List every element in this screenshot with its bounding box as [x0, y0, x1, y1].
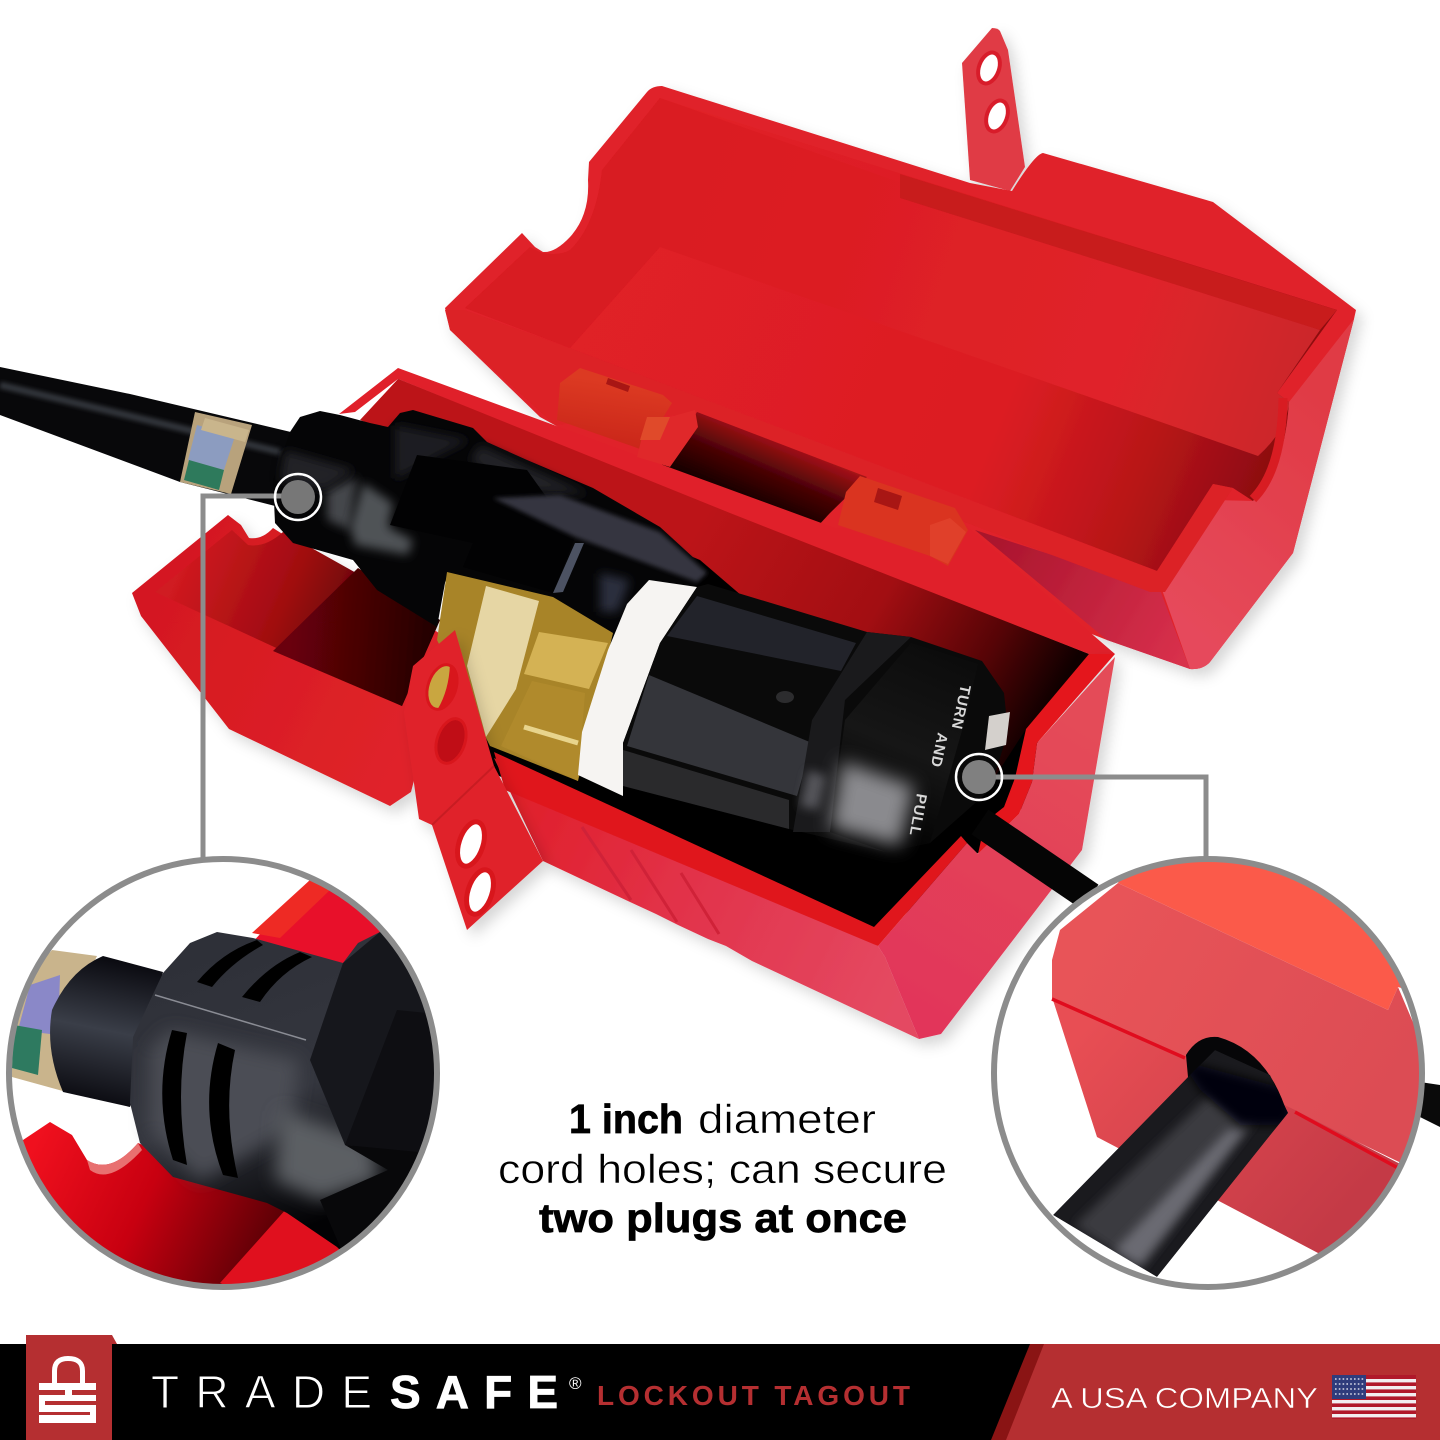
front face ribs [582, 827, 719, 934]
caption text block: cord holes; can secure [498, 1146, 947, 1192]
lid floor and inner walls [465, 98, 1337, 571]
lid right end face [1160, 319, 1354, 669]
dark interior [155, 530, 440, 706]
caption text block: diameter [698, 1096, 876, 1142]
detail circle ring [994, 859, 1422, 1287]
lid left end wall [465, 98, 660, 348]
rear rim band [339, 368, 1115, 654]
lid outer silhouette [445, 86, 1356, 669]
front locking tab with four holes [404, 630, 543, 930]
cord stub right of detail circle [1420, 1082, 1440, 1127]
end rim around cord hole [978, 654, 1115, 854]
foil label [8, 950, 97, 1093]
plug grip texture highlights [280, 425, 590, 555]
hinge slot [660, 412, 867, 527]
plug end text [906, 683, 974, 838]
footer bar [0, 1335, 1440, 1440]
tagline: LOCKOUT TAGOUT [597, 1380, 910, 1411]
lid side face below rim [975, 530, 1190, 669]
inner wall [360, 379, 1089, 800]
lower half lid, left side [132, 515, 450, 806]
hinge one [557, 368, 698, 467]
detail circle: plug strain relief [8, 859, 450, 1300]
holographic cord label [180, 412, 252, 494]
caption text block: 1 inch [569, 1096, 683, 1142]
cord through hole [1053, 1050, 1290, 1277]
hinge two [838, 476, 968, 566]
black plug, rear connector [273, 410, 707, 633]
bright top facet [1118, 862, 1401, 1010]
end face [878, 657, 1115, 1039]
plug shoulder grip [390, 455, 575, 593]
front face [494, 758, 919, 1039]
brand name: ® [569, 1374, 582, 1393]
detail circle: cord hole [994, 840, 1440, 1287]
logo tab [26, 1335, 117, 1440]
brand name: SAFE [390, 1366, 558, 1418]
curved plug grip band [493, 495, 707, 582]
connector line: left callout [203, 496, 297, 858]
upper lid of lockout box (open) [445, 28, 1356, 669]
marker dot: cord hole [956, 754, 1002, 800]
notch rim [1253, 398, 1283, 499]
plug end text: AND [927, 731, 951, 769]
brand name [151, 1366, 582, 1418]
collar [793, 632, 911, 832]
hole [1186, 1037, 1288, 1113]
plug vent slots [162, 940, 312, 1178]
end cap [830, 643, 978, 852]
plug close-up [130, 932, 388, 1250]
lower half [1054, 1002, 1399, 1253]
red company panel [991, 1344, 1440, 1440]
padlock logo icon [39, 1358, 96, 1423]
black plug, receptacle body [623, 584, 1010, 852]
cord exiting box through hole [980, 822, 1090, 897]
lid rear wall [660, 98, 1320, 456]
red box behind plug [256, 880, 380, 963]
outer shell [132, 515, 450, 806]
lid front rim [445, 310, 1233, 592]
marker dot: plug collar [275, 474, 321, 520]
cavity [398, 379, 1089, 940]
brand name: TRADE [151, 1366, 372, 1418]
front rim [494, 752, 967, 946]
caption text block [498, 1096, 947, 1241]
brass terminals [437, 572, 613, 781]
plug end text: PULL [906, 792, 930, 838]
main face upper half [1052, 883, 1432, 1172]
lower box, rear rim and inner wall [339, 368, 1115, 940]
caption text block: two plugs at once [539, 1195, 907, 1241]
locking tab with two holes [962, 28, 1025, 191]
detail circle ring [9, 859, 437, 1287]
white plug collar [578, 580, 697, 796]
seam line [1052, 999, 1398, 1168]
power cord entering the plug [0, 367, 295, 508]
lower box, front and end shell [494, 654, 1115, 1039]
cord close-up [50, 956, 163, 1107]
usa company label: A USA COMPANY [1051, 1383, 1318, 1415]
icon: american flag [1332, 1375, 1416, 1419]
ribbed bands [667, 596, 856, 671]
plug end text: TURN [948, 683, 974, 731]
connector line: right callout [980, 777, 1206, 858]
